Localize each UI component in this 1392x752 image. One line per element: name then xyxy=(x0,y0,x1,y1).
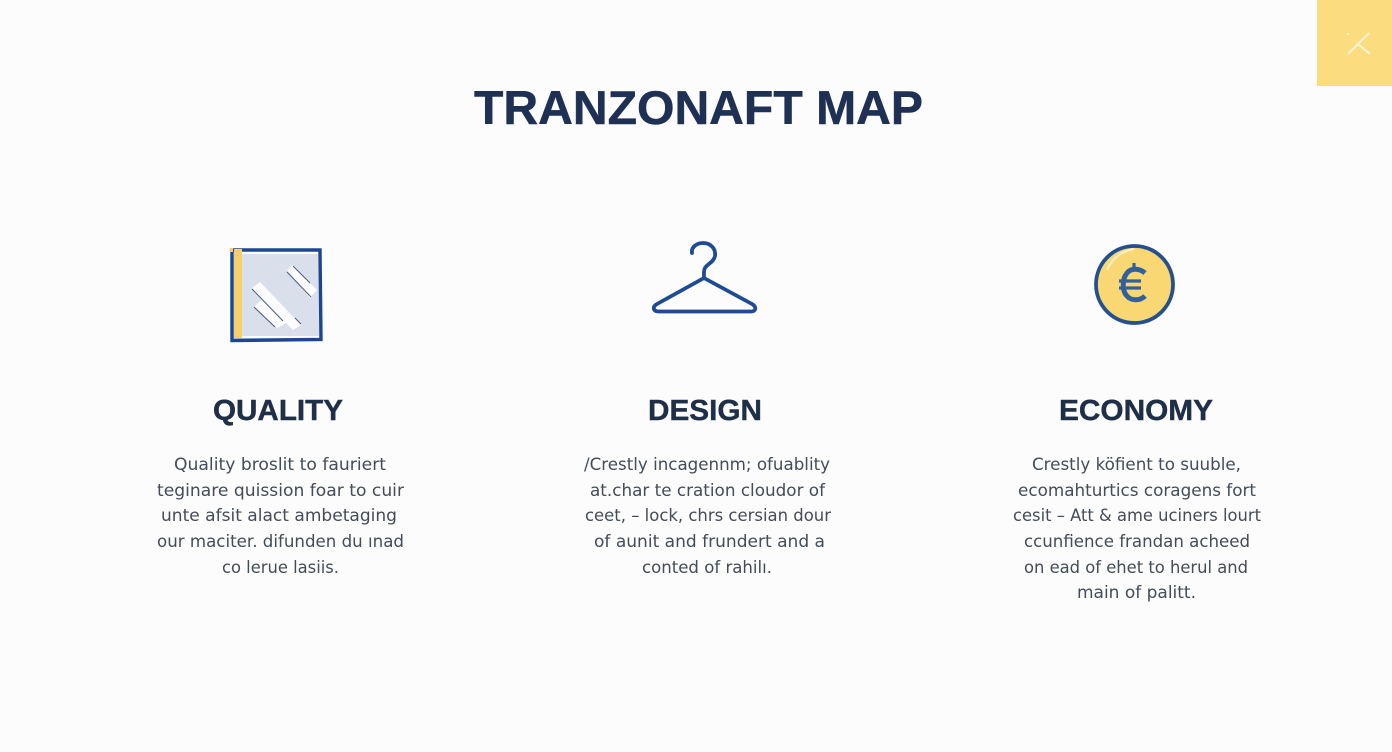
text block: design: at.char te cration cloudor of xyxy=(590,481,826,501)
text block: design: of aunit and frundert and a xyxy=(594,532,825,552)
text block: quality xyxy=(157,455,404,578)
corner tab with cross mark xyxy=(1317,0,1392,86)
text block: economy: on ead of ehet to herul and xyxy=(1024,558,1248,578)
heading: quality: QUALITY xyxy=(213,395,343,427)
text block: quality: Quality broslit to fauriert xyxy=(174,455,386,475)
title: TRANZONAFT MAP xyxy=(474,81,923,134)
text block: economy: ecomahturtics coragens fort xyxy=(1018,481,1256,501)
text block: quality: teginare quission foar to cuir xyxy=(157,481,404,501)
text block: economy: main of palitt. xyxy=(1077,583,1196,603)
text block: economy: Crestly köfient to suuble, xyxy=(1032,455,1241,475)
text block: quality: unte afsit alact ambetaging xyxy=(161,506,397,526)
text block: quality: our maciter. difunden du ınad xyxy=(157,532,404,552)
text block: economy: ccunfience frandan acheed xyxy=(1024,532,1250,552)
text block: design: conted of rahilı. xyxy=(642,558,772,578)
text block: design: ceet, – lock, chrs cersian dour xyxy=(585,506,831,526)
text block: quality: co lerue lasiis. xyxy=(222,558,339,578)
icon: glass square xyxy=(230,248,321,340)
panel: quality xyxy=(157,248,404,578)
text block: design: /Crestly incagennm; ofuablity xyxy=(584,455,830,475)
heading: design: DESIGN xyxy=(648,395,762,427)
text block: economy: cesit – Att & ame uciners lourt xyxy=(1013,506,1261,526)
text block: economy xyxy=(1013,455,1261,603)
icon: clothes hanger xyxy=(654,243,755,312)
text block: design xyxy=(584,455,831,578)
panel: economy xyxy=(1013,246,1261,603)
icon: euro coin xyxy=(1096,246,1173,323)
heading: economy: ECONOMY xyxy=(1059,395,1213,427)
panel: design xyxy=(584,243,831,578)
